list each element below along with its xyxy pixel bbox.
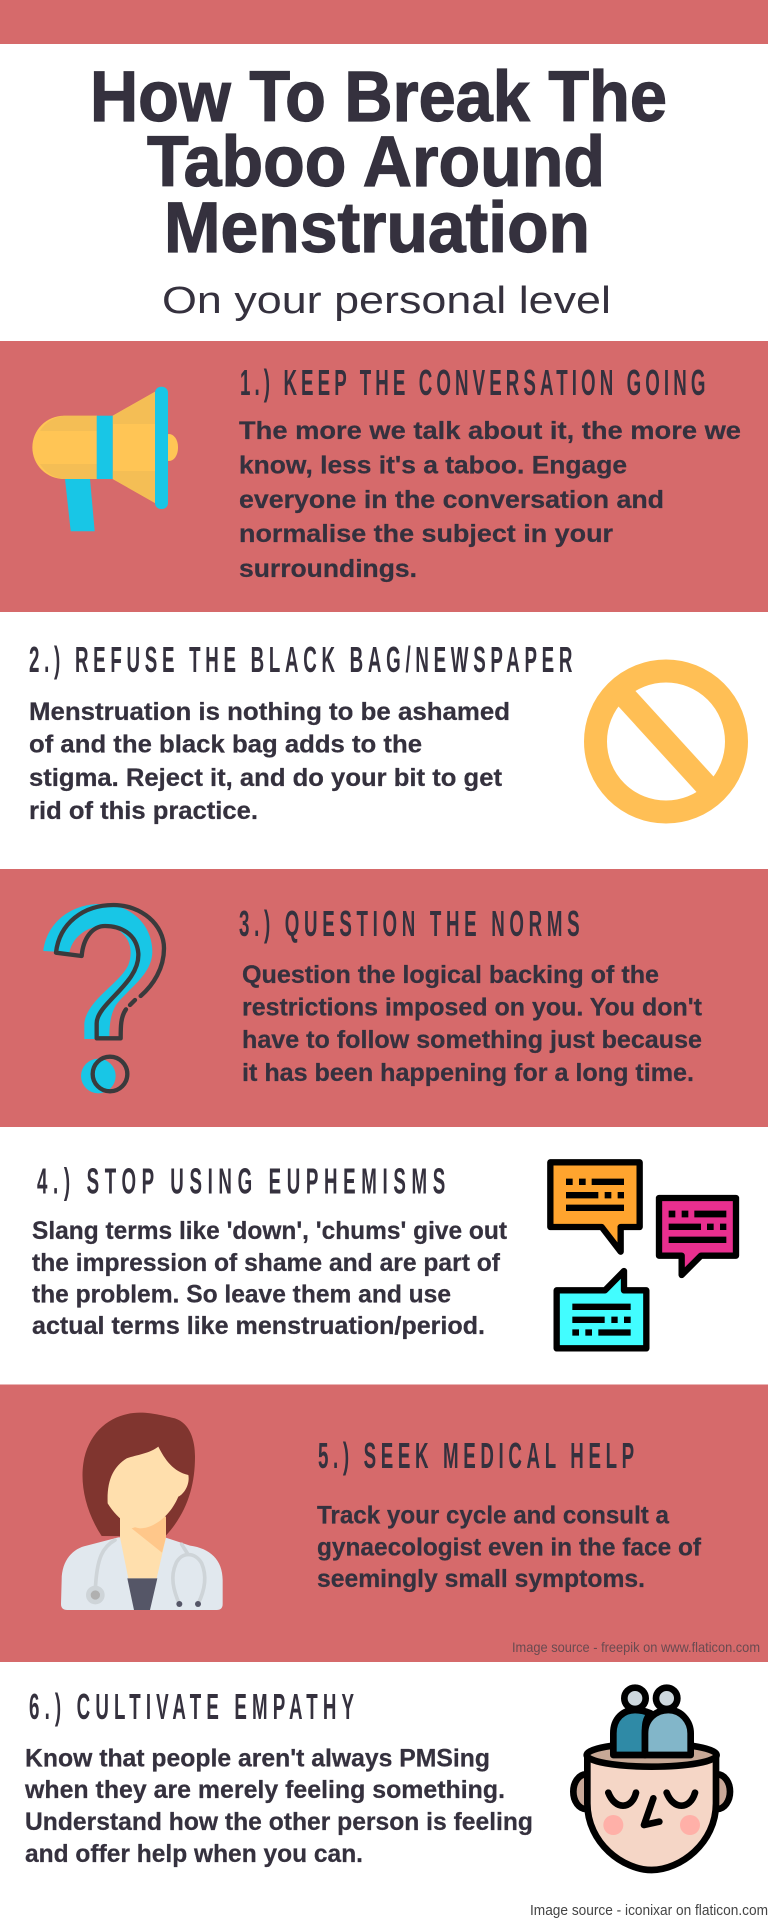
body text 4: the problem. So leave them and use xyxy=(32,1280,451,1308)
body text 2: Menstruation is nothing to be ashamed xyxy=(29,698,510,726)
body text 3: Question the logical backing of the xyxy=(242,961,659,989)
body text 4: Slang terms like 'down', 'chums' give out xyxy=(32,1217,508,1245)
heading 2: 2.) REFUSE THE BLACK BAG/NEWSPAPER xyxy=(29,641,573,681)
body text 1: normalise the subject in your xyxy=(239,520,613,548)
body text 5: Track your cycle and consult a xyxy=(317,1502,670,1530)
panel: 5 seek medical help xyxy=(0,1384,768,1662)
body text 5 xyxy=(317,1502,702,1593)
body text 1: The more we talk about it, the more we xyxy=(239,417,741,445)
icon: question mark xyxy=(43,904,164,1093)
icon: doctor xyxy=(61,1413,223,1610)
body text 3: have to follow something just because xyxy=(242,1026,702,1054)
icon: speech bubbles xyxy=(550,1162,736,1348)
icon: head with people xyxy=(573,1688,730,1870)
panel: 1 keep the conversation going xyxy=(0,341,768,612)
body text 6: when they are merely feeling something. xyxy=(24,1776,505,1804)
body text 3 xyxy=(242,961,703,1087)
body text 3: it has been happening for a long time. xyxy=(242,1059,694,1087)
body text 3: restrictions imposed on you. You don't xyxy=(242,994,703,1022)
body text 6: Understand how the other person is feeling xyxy=(25,1808,533,1836)
heading 1: 1.) KEEP THE CONVERSATION GOING xyxy=(240,364,705,404)
heading 5: 5.) SEEK MEDICAL HELP xyxy=(318,1437,634,1477)
top banner xyxy=(0,0,768,44)
body text 6: and offer help when you can. xyxy=(25,1840,363,1868)
body text 1 xyxy=(239,417,741,583)
body text 1: know, less it's a taboo. Engage xyxy=(239,452,627,480)
body text 2: of and the black bag adds to the xyxy=(29,731,422,759)
title: Menstruation xyxy=(164,189,590,268)
heading 4: 4.) STOP USING EUPHEMISMS xyxy=(37,1162,445,1202)
body text 6: Know that people aren't always PMSing xyxy=(25,1744,490,1772)
heading 6: 6.) CULTIVATE EMPATHY xyxy=(29,1688,354,1728)
body text 5: seemingly small symptoms. xyxy=(317,1565,645,1593)
icon: prohibition sign xyxy=(596,671,736,812)
icon: megaphone xyxy=(32,387,178,531)
body text 2: stigma. Reject it, and do your bit to get xyxy=(29,764,503,792)
panel: 6 cultivate empathy xyxy=(24,1688,768,1919)
heading 3: 3.) QUESTION THE NORMS xyxy=(239,905,580,945)
panel: 2 refuse the black bag xyxy=(29,641,736,825)
body text 5: gynaecologist even in the face of xyxy=(317,1534,702,1562)
body text 4: actual terms like menstruation/period. xyxy=(32,1312,485,1340)
subtitle: On your personal level xyxy=(162,280,611,322)
panel: 3 question the norms xyxy=(0,869,768,1127)
body text 1: everyone in the conversation and xyxy=(239,486,664,514)
body text 4 xyxy=(32,1217,508,1340)
panel: 4 stop using euphemisms xyxy=(32,1162,736,1348)
body text 2: rid of this practice. xyxy=(29,797,258,825)
body text 4: the impression of shame and are part of xyxy=(32,1249,501,1277)
body text 1: surroundings. xyxy=(239,555,417,583)
title xyxy=(90,58,667,268)
title: How To Break The xyxy=(90,58,667,137)
body text 6 xyxy=(24,1744,533,1868)
title: Taboo Around xyxy=(147,123,605,202)
body text 2 xyxy=(29,698,510,825)
